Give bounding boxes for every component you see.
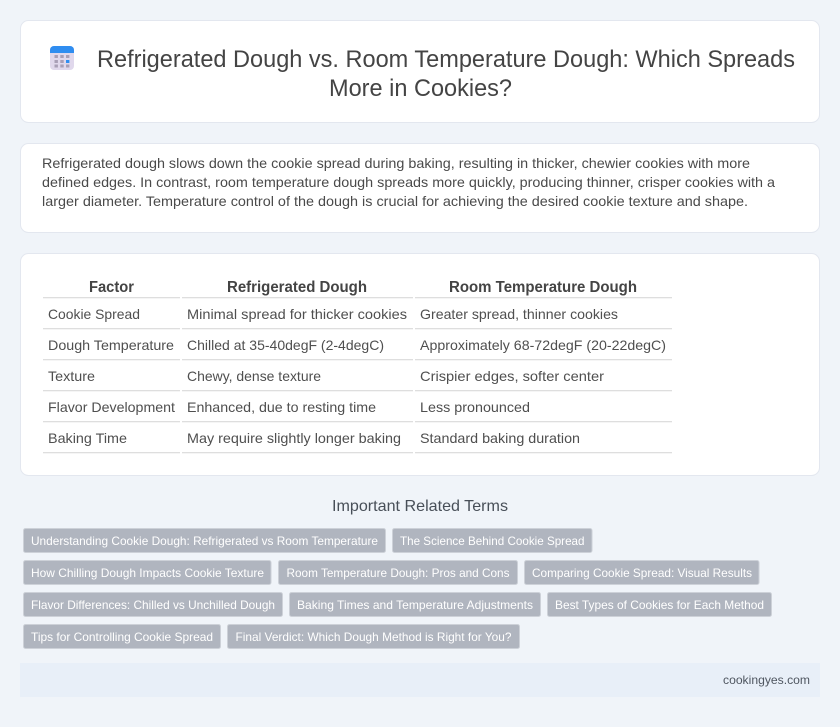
tag: Tips for Controlling Cookie Spread [31, 630, 213, 644]
row: texture [48, 368, 604, 384]
tag: Understanding Cookie Dough: Refrigerated vs Room Temperature [31, 534, 378, 548]
tag [24, 528, 386, 552]
tag [24, 624, 220, 648]
row: flavor development [48, 399, 530, 415]
tag [524, 560, 759, 584]
text block: summary [42, 155, 775, 209]
title: Refrigerated Dough vs. Room Temperature Dough: Which Spreads [97, 46, 795, 73]
tag [548, 592, 772, 616]
heading: related terms: Important Related Terms [332, 498, 508, 515]
panel: comparison table [20, 254, 820, 476]
row: flavor development: Flavor Development [48, 399, 175, 415]
tag [278, 560, 518, 584]
row: baking time: May require slightly longer baking [187, 430, 401, 446]
tag [24, 560, 271, 584]
tag: Room Temperature Dough: Pros and Cons [286, 566, 510, 580]
row: cookie spread: Minimal spread for thicker cookies [187, 306, 407, 322]
row: texture: Chewy, dense texture [187, 368, 321, 384]
tag: Best Types of Cookies for Each Method [555, 598, 764, 612]
text block: summary: defined edges. In contrast, room temperature dough spreads more quickly, producing thinner, crisper cookies with a [42, 174, 775, 190]
text block: summary: larger diameter. Temperature control of the dough is crucial for achieving the desired cookie texture and shape. [42, 193, 748, 209]
row: flavor development: Enhanced, due to resting time [187, 399, 376, 415]
row: dough temperature [48, 337, 666, 353]
tag [290, 592, 540, 616]
tag [392, 528, 592, 552]
row: texture: Texture [48, 368, 95, 384]
table header: Refrigerated Dough [227, 279, 367, 296]
icon: calendar [50, 46, 74, 70]
row: dough temperature: Dough Temperature [48, 337, 174, 353]
row: cookie spread [48, 306, 618, 322]
tag: Baking Times and Temperature Adjustments [297, 598, 533, 612]
title: More in Cookies? [329, 75, 512, 102]
tag [24, 592, 282, 616]
title [97, 46, 795, 102]
row: dough temperature: Chilled at 35-40degF (2-4degC) [187, 337, 384, 353]
tag: The Science Behind Cookie Spread [400, 534, 584, 548]
header panel [20, 20, 820, 122]
tag [228, 624, 520, 648]
panel: summary paragraph [20, 144, 820, 232]
row: cookie spread: Greater spread, thinner cookies [420, 306, 618, 322]
footer [20, 663, 820, 697]
row: baking time: Standard baking duration [420, 430, 580, 446]
row: baking time [48, 430, 580, 446]
row: texture: Crispier edges, softer center [420, 368, 604, 384]
tag: Flavor Differences: Chilled vs Unchilled Dough [31, 598, 275, 612]
related terms tags [24, 528, 772, 648]
tag: How Chilling Dough Impacts Cookie Texture [31, 566, 264, 580]
tag: Final Verdict: Which Dough Method is Right for You? [236, 630, 512, 644]
row: cookie spread: Cookie Spread [48, 306, 140, 322]
table header [89, 279, 637, 296]
row: baking time: Baking Time [48, 430, 127, 446]
tag: Comparing Cookie Spread: Visual Results [532, 566, 752, 580]
table header: Factor [89, 279, 134, 296]
row: dough temperature: Approximately 68-72degF (20-22degC) [420, 337, 666, 353]
text block: summary: Refrigerated dough slows down the cookie spread during baking, resulting in thicker, chewier cookies with more [42, 155, 750, 171]
footer: cookingyes.com [723, 673, 810, 687]
row: flavor development: Less pronounced [420, 399, 530, 415]
table header: Room Temperature Dough [449, 279, 637, 296]
